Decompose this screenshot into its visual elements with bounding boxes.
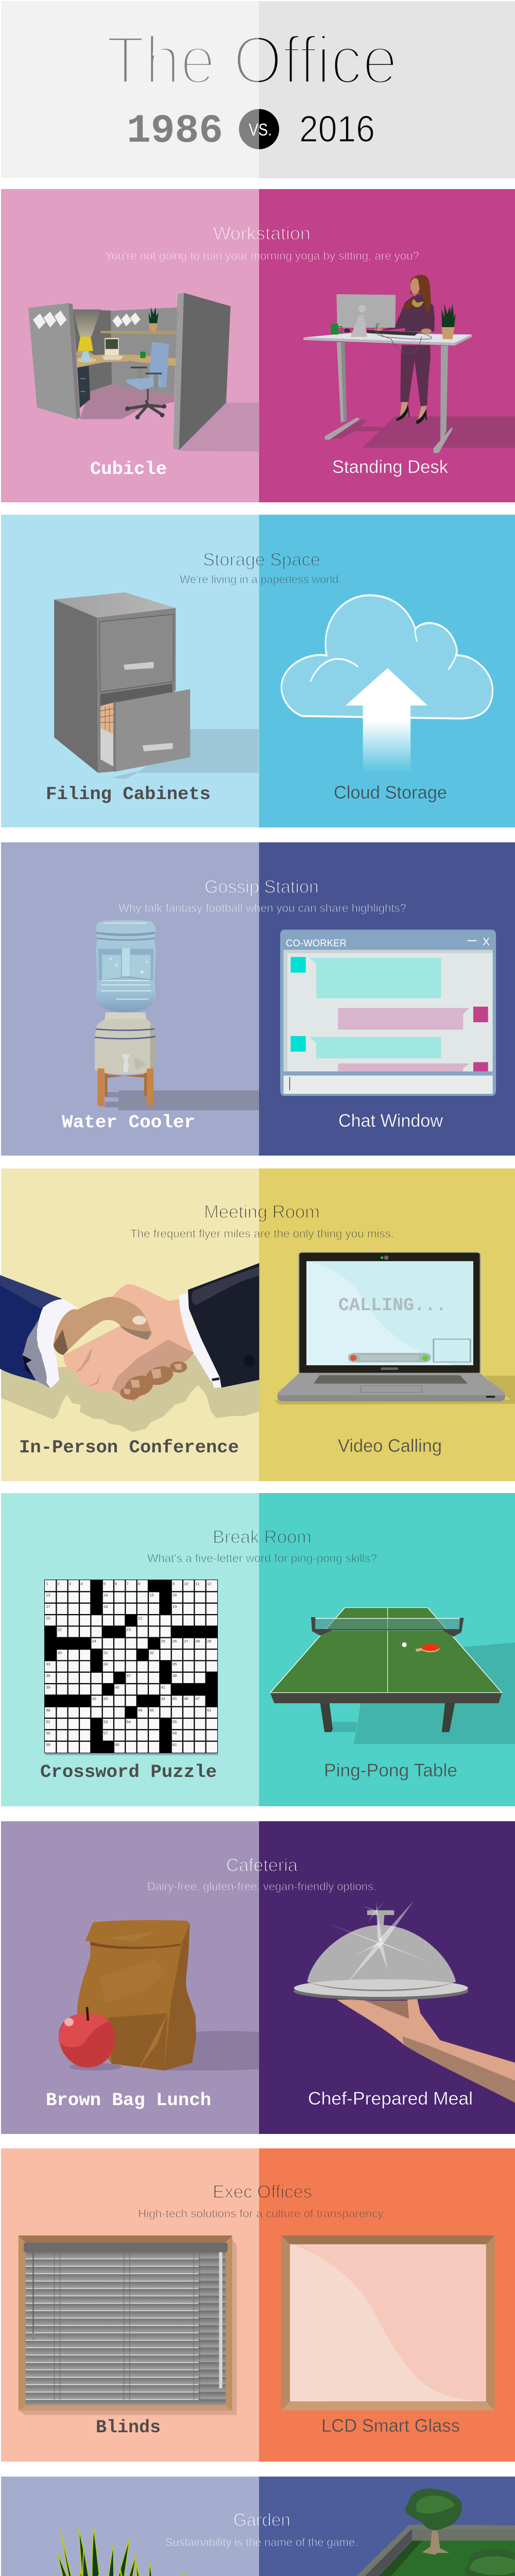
versus badge: VS. (249, 120, 272, 139)
label: filing cabinets: Filing Cabinets (46, 784, 211, 805)
chat title: CO-WORKER (286, 938, 347, 949)
label: chef-prepared meal: Chef-Prepared Meal (308, 2089, 473, 2109)
heading: workstation: Workstation (213, 224, 311, 244)
title: The Office (106, 22, 398, 98)
subheading: exec offices: High-tech solutions for a culture of transparency. (138, 2207, 386, 2220)
chat window (280, 929, 496, 1096)
label: standing desk: Standing Desk (332, 457, 448, 477)
year 1986: 1986 (127, 109, 223, 154)
heading: cafeteria: Cafeteria (226, 1855, 298, 1875)
heading: garden: Garden (233, 2510, 290, 2530)
subheading: garden: Sustainability is the name of the game. (165, 2536, 358, 2549)
subheading: break room: What's a five-letter word for ping-pong skills? (147, 1552, 377, 1565)
label: blinds: Blinds (96, 2417, 161, 2438)
illustration: smart glass window (281, 2235, 494, 2411)
screen text: CALLING... (338, 1295, 447, 1316)
heading: break room: Break Room (213, 1527, 312, 1547)
label: chat window: Chat Window (338, 1111, 443, 1131)
label: cubicle: Cubicle (90, 459, 167, 480)
label: water cooler: Water Cooler (62, 1112, 195, 1133)
versus badge (239, 109, 279, 149)
label: ping-pong table: Ping-Pong Table (324, 1760, 457, 1781)
illustration: cloud upload (281, 596, 493, 772)
illustration: handshake (0, 1263, 259, 1432)
label: brown bag lunch: Brown Bag Lunch (46, 2090, 211, 2111)
illustration: water cooler (95, 920, 259, 1110)
panel: exec offices (1, 2148, 515, 2462)
subheading: gossip station: Why talk fantasy football when you can share highlights? (118, 902, 406, 914)
illustration: cubicle (28, 293, 259, 452)
illustration: cloche on hand (294, 1901, 515, 2103)
heading: meeting room: Meeting Room (204, 1202, 320, 1222)
illustration: brown bag and apple (59, 1920, 259, 2071)
panel: storage space (1, 515, 515, 827)
panel: break room (1, 1493, 515, 1806)
header panel (1, 1, 515, 178)
panel: garden (1, 2477, 515, 2576)
illustration: ping-pong table (270, 1607, 515, 1744)
illustration: laptop (274, 1252, 515, 1404)
heading: storage space: Storage Space (203, 550, 320, 570)
subheading: workstation: You're not going to ruin your morning yoga by sitting, are you? (105, 249, 419, 262)
label: in-person conference: In-Person Conference (19, 1437, 239, 1458)
year 2016: 2016 (299, 109, 375, 150)
label: cloud storage: Cloud Storage (334, 783, 447, 803)
panel: cafeteria (1, 1821, 515, 2134)
illustration: blinds (19, 2235, 237, 2415)
subheading: meeting room: The frequent flyer miles are the only thing you miss. (130, 1227, 394, 1240)
label: lcd smart glass: LCD Smart Glass (321, 2416, 460, 2436)
illustration: green roof (292, 2488, 515, 2576)
panel: gossip station (1, 842, 515, 1156)
label: video calling: Video Calling (338, 1436, 442, 1456)
label: crossword puzzle: Crossword Puzzle (40, 1762, 217, 1783)
close button: X (483, 936, 490, 948)
subheading: storage space: We're living in a paperless world. (180, 573, 341, 586)
crossword puzzle (44, 1580, 218, 1755)
heading: gossip station: Gossip Station (204, 877, 319, 897)
panel: meeting room (0, 1168, 515, 1481)
illustration: fake plants (58, 2527, 259, 2576)
panel: workstation (1, 189, 515, 502)
subheading: cafeteria: Dairy-free, gluten-free, vegan-friendly options. (147, 1880, 376, 1893)
illustration: filing cabinet (54, 592, 259, 779)
heading: exec offices: Exec Offices (213, 2182, 312, 2202)
illustration: standing desk (303, 275, 515, 453)
